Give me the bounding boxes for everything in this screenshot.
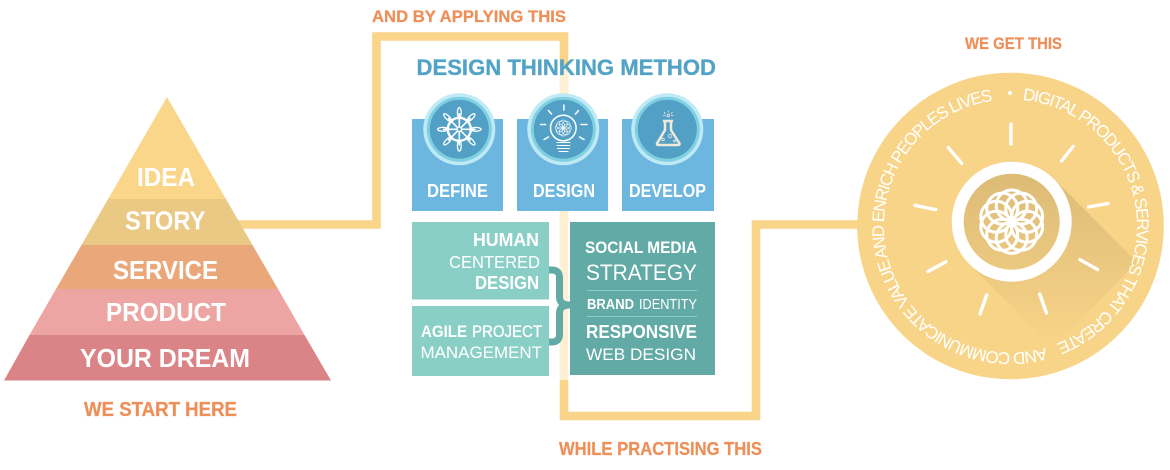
card: design xyxy=(517,93,608,211)
label: while practising this: WHILE PRACTISING THIS xyxy=(559,439,762,459)
pyramid layer: idea: IDEA xyxy=(137,162,195,192)
text: design: DESIGN xyxy=(475,273,539,293)
text: agile project: AGILE xyxy=(421,323,467,341)
pyramid layer: service: SERVICE xyxy=(113,255,218,285)
sun rays xyxy=(915,124,1108,314)
panel: digital services xyxy=(570,222,715,375)
text: brand identity: IDENTITY xyxy=(639,296,697,313)
center ring xyxy=(952,162,1072,282)
icon: light bulb xyxy=(527,93,599,165)
bullet separator xyxy=(1008,91,1012,95)
text: web design: WEB DESIGN xyxy=(586,345,696,364)
connector line: faded section behind method xyxy=(560,65,568,381)
panel: agile project management xyxy=(412,306,549,376)
icon: ship wheel xyxy=(423,93,495,165)
pyramid layer: product: PRODUCT xyxy=(106,297,226,327)
long shadow xyxy=(969,179,1137,348)
text: responsive: RESPONSIVE xyxy=(586,322,697,342)
pyramid xyxy=(4,97,331,380)
text: agile project: PROJECT xyxy=(472,323,542,341)
text: centered: CENTERED xyxy=(449,252,540,272)
label: we get this: WE GET THIS xyxy=(965,34,1062,53)
text: social media: SOCIAL MEDIA xyxy=(585,239,697,257)
card: define xyxy=(412,93,503,211)
connector line: method to result xyxy=(564,224,862,416)
pyramid layer: service xyxy=(56,245,278,289)
result badge xyxy=(857,72,1164,380)
label: we start here: WE START HERE xyxy=(84,399,237,421)
circular text: communicate value: AND COMMUNICATE VALUE AND ENRICH PEOPLES LIVES xyxy=(872,90,1046,364)
panel: human centered design xyxy=(412,222,549,300)
heading: design thinking method: DESIGN THINKING METHOD xyxy=(416,55,716,80)
card: develop xyxy=(622,93,714,211)
connector line: pyramid to method xyxy=(238,36,564,224)
circular text: digital products: DIGITAL PRODUCTS & SERVICES THAT CREATE xyxy=(1024,88,1149,354)
card title: develop: DEVELOP xyxy=(629,181,706,201)
pyramid layer: your dream xyxy=(4,335,331,380)
text: strategy: STRATEGY xyxy=(586,260,697,285)
bracket connector xyxy=(549,270,570,342)
label: and by applying this: AND BY APPLYING THIS xyxy=(372,7,566,26)
pyramid layer: idea xyxy=(108,97,226,199)
card title: define: DEFINE xyxy=(427,181,488,201)
text: agile project xyxy=(421,323,542,341)
text: management: MANAGEMENT xyxy=(420,344,542,362)
pyramid layer: product xyxy=(30,289,304,335)
card title: design: DESIGN xyxy=(533,181,595,201)
pyramid layer: your dream: YOUR DREAM xyxy=(80,343,250,373)
icon: flask xyxy=(631,93,703,165)
pyramid layer: story: STORY xyxy=(125,206,206,236)
text: human: HUMAN xyxy=(473,230,539,250)
rosette emblem xyxy=(981,190,1043,253)
text: brand identity xyxy=(587,296,697,313)
pyramid layer: story xyxy=(82,199,252,245)
text: brand identity: BRAND xyxy=(587,296,634,313)
